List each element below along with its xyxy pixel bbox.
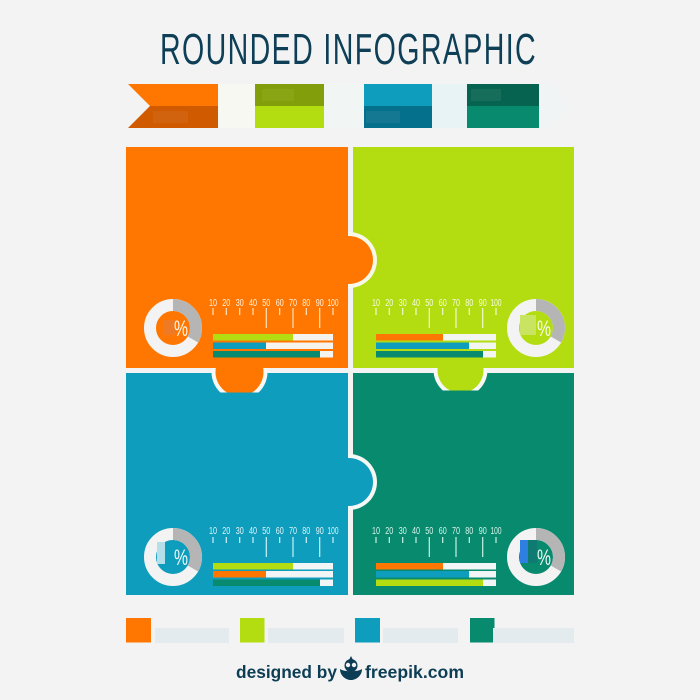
scale: green: 100 <box>490 526 502 537</box>
legend <box>126 618 574 643</box>
donut: green <box>513 534 559 580</box>
scale: green: 20 <box>385 526 394 537</box>
scale: lime: 60 <box>439 298 447 309</box>
scale: green: 50 <box>425 526 434 537</box>
scale: lime: 20 <box>385 298 394 309</box>
bars: blue <box>213 563 333 586</box>
scale: blue: 60 <box>276 526 284 537</box>
donut: green: % <box>537 545 551 570</box>
scale: blue: 10 <box>209 526 217 537</box>
scale: blue: 80 <box>302 526 311 537</box>
bars: orange <box>213 334 333 358</box>
scale: lime <box>372 298 502 328</box>
scale: lime: 90 <box>479 298 487 309</box>
footer credit: designed by <box>236 662 337 682</box>
scale: orange: 50 <box>262 298 271 309</box>
donut: orange: % <box>174 316 188 341</box>
scale: lime: 70 <box>452 298 460 309</box>
donut: blue: % <box>174 545 188 570</box>
scale: green: 70 <box>452 526 460 537</box>
scale: orange: 90 <box>316 298 324 309</box>
legend item: green <box>470 618 574 643</box>
scale: blue: 30 <box>236 526 244 537</box>
scale: blue: 90 <box>316 526 324 537</box>
scale: green: 60 <box>439 526 447 537</box>
scale: blue: 100 <box>328 526 339 537</box>
scale: orange: 100 <box>328 298 339 309</box>
ribbon segment: green <box>467 84 539 128</box>
scale: orange: 80 <box>302 298 311 309</box>
donut: orange <box>150 305 196 351</box>
scale: orange: 30 <box>236 298 244 309</box>
legend item: blue <box>355 618 458 643</box>
panel: green <box>353 373 574 595</box>
scale: orange: 60 <box>276 298 284 309</box>
scale: orange <box>209 298 339 328</box>
scale: orange: 40 <box>249 298 257 309</box>
scale: green: 10 <box>372 526 380 537</box>
ribbon banner <box>128 84 570 128</box>
scale: blue: 20 <box>222 526 231 537</box>
scale: lime: 10 <box>372 298 380 309</box>
scale: lime: 80 <box>465 298 474 309</box>
puzzle tab: blue <box>321 454 377 510</box>
puzzle tab: orange right <box>321 232 377 288</box>
ribbon segment: orange <box>128 84 218 128</box>
bars: green <box>376 563 496 586</box>
scale: green: 40 <box>412 526 420 537</box>
donut: lime: % <box>537 316 551 341</box>
footer credit <box>236 656 464 682</box>
panel: blue <box>126 373 377 595</box>
scale: blue: 70 <box>289 526 297 537</box>
icon: freepik logo <box>340 656 362 680</box>
donut: blue <box>150 534 196 580</box>
donut: lime <box>513 305 559 351</box>
scale: lime: 100 <box>490 298 502 309</box>
scale: lime: 40 <box>412 298 420 309</box>
scale: green <box>372 526 502 557</box>
puzzle tab: lime <box>434 368 488 390</box>
scale: lime: 30 <box>399 298 407 309</box>
ribbon segment: lime <box>255 84 324 128</box>
scale: green: 80 <box>465 526 474 537</box>
scale: orange: 10 <box>209 298 217 309</box>
scale: blue <box>209 526 339 557</box>
footer credit: freepik.com <box>365 662 464 682</box>
scale: orange: 70 <box>289 298 297 309</box>
scale: blue: 40 <box>249 526 257 537</box>
legend item: lime <box>240 618 344 643</box>
scale: blue: 50 <box>262 526 271 537</box>
panel: orange <box>126 147 377 400</box>
bars: lime <box>376 334 496 358</box>
legend item: orange <box>126 618 229 643</box>
title: ROUNDED INFOGRAPHIC <box>160 24 536 73</box>
scale: green: 90 <box>479 526 487 537</box>
puzzle tab: orange bottom <box>212 368 268 392</box>
panel: lime <box>353 147 574 397</box>
scale: lime: 50 <box>425 298 434 309</box>
scale: orange: 20 <box>222 298 231 309</box>
scale: green: 30 <box>399 526 407 537</box>
ribbon segment: blue <box>364 84 432 128</box>
